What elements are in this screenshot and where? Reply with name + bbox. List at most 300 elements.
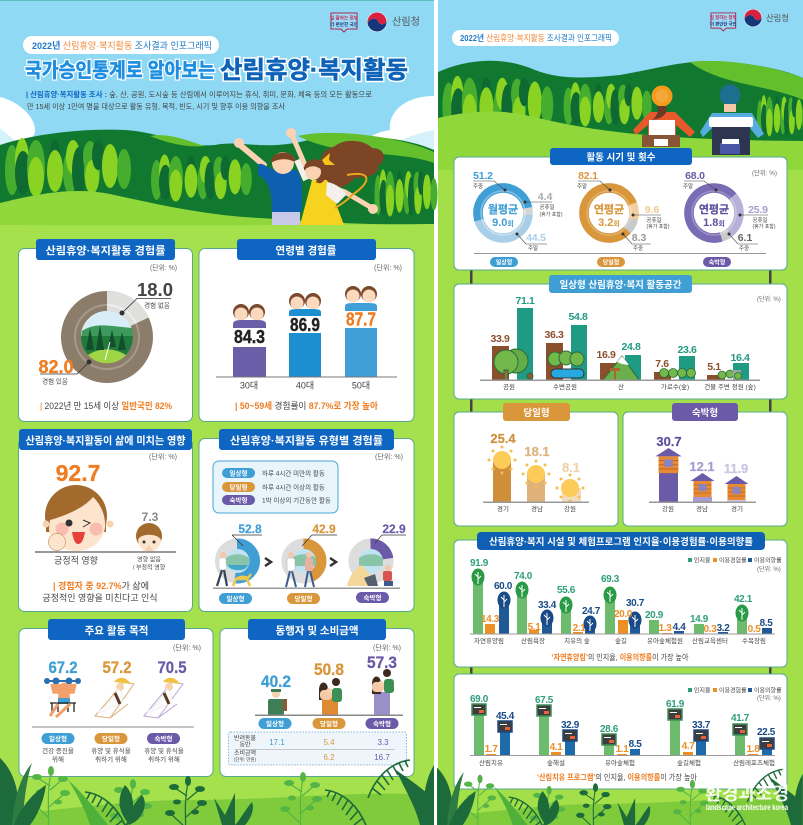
categories: 자연휴양림 — [474, 636, 504, 645]
values — [48, 658, 186, 677]
bar: 40s: 86.9 — [290, 315, 320, 335]
pills — [42, 733, 180, 744]
categories: 가로수(숲) — [661, 382, 689, 391]
categories: 치유의 숲 — [564, 636, 590, 645]
callout 82.0: 경험 있음 — [42, 376, 68, 386]
values: 30.7 — [626, 598, 645, 609]
legend: 인지율 — [694, 556, 711, 564]
logo: government campaign badge — [710, 13, 737, 31]
values: 32.9 — [561, 720, 580, 731]
values — [656, 434, 748, 476]
icon: garden — [718, 370, 742, 380]
values: 16.4 — [730, 352, 750, 364]
heading pill: 2022년 산림휴양·복지활동 조사결과 인포그래픽 — [460, 33, 612, 43]
ring: overnight: 연평균 — [699, 203, 729, 216]
values: 16.9 — [596, 349, 616, 361]
values: 5.1 — [707, 361, 721, 373]
age labels: 30대 — [240, 380, 258, 390]
donut chart — [71, 301, 143, 373]
ring: daily: 월평균 — [488, 202, 518, 216]
axis — [470, 755, 775, 756]
logo text: 산림청 — [766, 13, 789, 23]
icon: mountain — [603, 356, 639, 380]
baseline — [35, 551, 176, 553]
values: 12.1 — [689, 459, 715, 474]
logo text: 산림청 — [392, 16, 420, 28]
forest scene in donut — [81, 311, 133, 363]
heading — [237, 239, 376, 260]
values: 54.8 — [568, 311, 588, 323]
heading — [19, 429, 192, 450]
categories: 숲길 — [615, 637, 627, 645]
left panel background — [0, 0, 438, 825]
legend — [688, 686, 782, 694]
categories: 산 — [618, 382, 624, 391]
companion table: 6.2 — [323, 753, 335, 762]
pills: 당일형 — [102, 734, 120, 743]
labels: 영향 없음 — [137, 556, 161, 564]
values — [470, 558, 773, 635]
values: 1.1 — [616, 744, 629, 755]
companion table: (단위: 만원) — [234, 756, 257, 763]
panel: experience rate — [18, 239, 192, 422]
icon: deck chair — [95, 678, 134, 718]
heading: 산림휴양·복지 시설 및 체험프로그램 인지율·이용경험률·이용의향률 — [489, 536, 753, 548]
categories: 경남 — [531, 504, 543, 513]
bar: 30s — [233, 304, 266, 377]
values: 33.4 — [538, 600, 557, 611]
panel: facility awareness — [454, 532, 787, 667]
axis — [483, 502, 589, 503]
purpose labels — [42, 746, 184, 764]
ring: daily: 4.4 — [538, 191, 552, 203]
categories: 숲길체험 — [677, 759, 701, 767]
values — [490, 295, 750, 373]
heading — [550, 148, 692, 165]
legend: 이용경험률 — [719, 556, 747, 564]
companion table: 반려동물 — [234, 734, 257, 742]
heading: 당일형 — [523, 407, 550, 419]
ring: overnight: 68.0 — [685, 170, 705, 182]
pills — [219, 592, 389, 604]
values: 67.2 — [48, 658, 78, 677]
values: 22.5 — [757, 727, 776, 738]
donut: overnight type: 22.9 — [382, 522, 406, 536]
logo: taegeuk emblem — [367, 12, 387, 32]
axis — [470, 634, 775, 635]
purpose labels: 취하기 위해 — [148, 754, 180, 764]
legend — [688, 556, 782, 564]
values: 8.5 — [760, 618, 773, 629]
values: 24.7 — [582, 606, 601, 617]
heading — [219, 429, 394, 450]
chevron — [330, 558, 336, 566]
values: 61.9 — [666, 699, 685, 710]
title — [25, 57, 408, 84]
icon: small worried face — [136, 523, 162, 552]
value 7.3: 7.3 — [142, 510, 159, 524]
unit: (단위: %) — [757, 295, 781, 303]
categories: 강원 — [564, 504, 576, 513]
bar: 30s: 84.3 — [234, 327, 265, 347]
panel: effect on life — [18, 429, 192, 612]
values: 30.7 — [656, 434, 682, 449]
ring: daily: 9.0회 — [492, 217, 514, 229]
legend: 이용경험률 — [719, 686, 747, 694]
heading: 동행자 및 소비금액 — [275, 624, 359, 637]
values: 3.2 — [717, 623, 730, 634]
categories: 유아숲체험 — [605, 758, 635, 767]
heading: 연령별 경험률 — [276, 244, 337, 257]
values: 60.0 — [494, 581, 513, 592]
purpose labels: 위해 — [52, 754, 64, 764]
donut: overnight type — [347, 522, 406, 586]
caption: ‘산림치유 프로그램’의 인지율, 이용의향률이 가장 높아 — [537, 772, 698, 782]
values: 4.1 — [550, 742, 563, 753]
pills: 당일형 — [295, 594, 312, 603]
values: 69.3 — [601, 574, 620, 585]
axis — [649, 502, 756, 503]
pills — [258, 718, 398, 729]
donut: daily type — [217, 522, 262, 586]
values: 69.0 — [470, 694, 489, 705]
unit: (단위: %) — [375, 452, 403, 461]
ring: overnight: 25.9 — [748, 204, 768, 216]
callout 18.0: 18.0 — [137, 279, 173, 300]
companion table: 동반 — [239, 740, 251, 748]
pills: 숙박형 — [709, 258, 725, 266]
unit: (단위: %) — [374, 263, 402, 272]
donut: day trip type — [286, 522, 337, 587]
values: 91.9 — [470, 558, 489, 569]
value 92.7: 92.7 — [56, 460, 100, 486]
values: 50.8 — [314, 660, 344, 679]
values: 67.5 — [535, 695, 554, 706]
legend box: 당일형 — [230, 482, 247, 492]
ring: overnight: (휴가 포함) — [752, 223, 776, 230]
divider — [474, 253, 766, 254]
bars with suns — [488, 446, 584, 502]
legend box: 하루 4시간 이상의 활동 — [262, 482, 325, 492]
heading: 숙박형 — [692, 407, 718, 419]
categories — [497, 504, 576, 513]
values: 55.6 — [557, 585, 576, 596]
values: 1.8 — [747, 744, 760, 755]
caption: | 2022년 만 15세 이상 일반국민 82% — [40, 400, 172, 411]
bars — [474, 706, 772, 755]
categories: 수목장림 — [742, 636, 766, 645]
icons: sign boards — [472, 704, 774, 749]
bottom foliage right — [437, 768, 803, 825]
ring: day trip: 공휴일 — [646, 216, 662, 224]
values: 25.4 — [490, 431, 516, 446]
ring: day trip — [574, 170, 670, 252]
categories — [662, 504, 743, 513]
panel: companions and spending — [220, 619, 414, 776]
heading pill — [23, 36, 219, 54]
heading — [477, 532, 765, 550]
pills — [490, 257, 731, 267]
bar: 50s — [345, 286, 377, 377]
heading — [36, 239, 175, 260]
categories: 산림레포츠체험 — [733, 758, 775, 767]
labels: / 부정적 영향 — [133, 564, 166, 572]
values: 20.9 — [645, 610, 664, 621]
donut: day trip type: 42.9 — [312, 522, 336, 536]
companion table: 5.4 — [323, 738, 335, 747]
unit: (단위: %) — [173, 643, 201, 652]
ring: day trip: 연평균 — [594, 203, 624, 216]
values: 1.3 — [659, 623, 672, 634]
age labels — [240, 380, 370, 390]
panel: day trip regions — [454, 403, 618, 526]
values: 57.3 — [367, 653, 397, 672]
heading: 주요 활동 목적 — [85, 624, 148, 637]
values: 5.1 — [528, 622, 541, 633]
caption: ‘자연휴양림’의 인지율, 이용의향률이 가장 높아 — [552, 652, 689, 662]
illustration: two hikers from behind — [633, 84, 764, 155]
values: 4.4 — [673, 622, 686, 633]
ring: daily: (휴가 포함) — [539, 211, 563, 218]
bars — [492, 308, 749, 380]
purpose labels: 취하기 위해 — [95, 754, 127, 764]
pills: 일상형 — [496, 258, 512, 266]
heading: 산림휴양·복지활동이 삶에 미치는 영향 — [26, 434, 186, 447]
values: 57.2 — [102, 658, 132, 677]
icon: family bar 2 — [372, 669, 394, 715]
labels — [54, 554, 166, 572]
callout 82.0 — [38, 357, 92, 386]
bar: 40s — [289, 293, 321, 377]
labels: 긍정적 영향 — [54, 554, 98, 566]
values: 71.1 — [515, 295, 535, 307]
baseline — [255, 714, 403, 716]
icon: family bar — [319, 678, 342, 715]
values: 28.6 — [600, 724, 619, 735]
heading pill: 2022년 산림휴양·복지활동 조사결과 인포그래픽 — [32, 40, 212, 52]
icon: street trees — [660, 368, 696, 378]
heading: 산림휴양·복지활동 유형별 경험률 — [230, 434, 383, 447]
title: 국가승인통계로 알아보는 — [25, 59, 215, 82]
donut: daily type: 52.8 — [238, 522, 262, 536]
ring: overnight: 주중 — [739, 245, 749, 252]
ring: day trip: 82.1 — [578, 170, 598, 182]
caption: | 경험자 중 92.7%가 삶에 — [53, 580, 149, 591]
values: 18.1 — [524, 444, 550, 459]
unit: (단위: %) — [373, 643, 401, 652]
panel: experience by type — [199, 429, 414, 612]
purpose labels: 휴양 및 휴식을 — [144, 746, 184, 755]
purpose labels: 휴양 및 휴식을 — [91, 746, 131, 755]
title: 국가승인통계로 알아보는 — [25, 59, 215, 82]
panel: main purpose — [19, 619, 213, 776]
survey description: 만 15세 이상 1만여 명을 대상으로 활동 유형, 목적, 빈도, 시기 및 향후 이용 의향을 조사 — [27, 101, 285, 111]
categories: 강원 — [662, 504, 674, 513]
values: 14.9 — [690, 614, 709, 625]
heading — [48, 619, 185, 640]
icon: smiling face — [42, 485, 114, 551]
unit: (단위: %) — [149, 452, 177, 461]
companion table: 17.1 — [269, 738, 285, 747]
values: 24.8 — [621, 341, 641, 353]
ring: day trip: (휴가 포함) — [646, 223, 670, 230]
axis — [480, 380, 760, 381]
values: 36.3 — [544, 329, 564, 341]
values: 45.4 — [496, 711, 515, 722]
baseline — [213, 588, 400, 589]
legend: 인지율 — [694, 686, 711, 694]
values: 7.6 — [655, 358, 669, 370]
ring: day trip: 9.6 — [645, 204, 659, 216]
heading — [503, 403, 570, 421]
categories: 수변공원 — [553, 382, 577, 391]
callout 18.0 — [120, 279, 173, 316]
caption: 긍정적인 영향을 미친다고 인식 — [42, 592, 158, 603]
ring: daily — [472, 170, 563, 252]
legend box: 하루 4시간 미만의 활동 — [262, 468, 325, 478]
panel: program awareness — [454, 674, 787, 789]
right panel background — [438, 0, 803, 825]
values: 33.9 — [490, 333, 510, 345]
ring: daily: 주말 — [528, 244, 538, 252]
ring: daily: 44.5 — [526, 232, 546, 244]
icon: waterside park — [548, 351, 584, 378]
caption: | 50~59세 경험률이 87.7%로 가장 높아 — [235, 400, 379, 411]
title: 산림휴양·복지활동 — [220, 57, 408, 84]
ring: day trip: 주중 — [633, 245, 643, 252]
values: 14.3 — [481, 614, 500, 625]
values: 0.3 — [704, 624, 717, 635]
values: 70.5 — [158, 658, 186, 677]
caption — [42, 580, 158, 603]
categories: 경기 — [497, 504, 509, 513]
pills: 숙박형 — [364, 593, 381, 602]
heading — [549, 275, 692, 293]
bars — [473, 575, 772, 634]
ring: daily: 주중 — [473, 183, 483, 190]
panel: timing and frequency — [454, 148, 787, 270]
values: 20.0 — [614, 609, 633, 620]
categories — [474, 636, 766, 645]
values: 42.1 — [734, 594, 753, 605]
values: 74.0 — [514, 571, 533, 582]
heading: 활동 시기 및 횟수 — [586, 152, 656, 164]
heading pill — [452, 30, 619, 46]
values: 41.7 — [731, 713, 750, 724]
values: 8.1 — [562, 460, 580, 475]
heading — [672, 403, 738, 421]
heading: 일상형 산림휴양·복지 활동공간 — [560, 279, 682, 291]
title: 산림휴양·복지활동 — [220, 57, 408, 84]
icons: tree tops on bars — [472, 568, 748, 632]
legend: 이용의향률 — [754, 686, 782, 694]
logo: taegeuk emblem — [744, 9, 762, 27]
age labels: 50대 — [352, 380, 370, 390]
axis — [216, 376, 397, 378]
categories — [503, 382, 756, 391]
pills: 당일형 — [320, 719, 338, 728]
heading — [248, 619, 386, 640]
watermark: 환경과조경 — [705, 784, 789, 804]
values — [470, 694, 776, 755]
pills: 일상형 — [227, 594, 244, 603]
ring: overnight: 1.8회 — [703, 217, 725, 229]
categories: 유아숲체험원 — [647, 636, 683, 645]
age labels: 40대 — [296, 380, 314, 390]
survey description — [26, 89, 372, 111]
callout 82.0: 82.0 — [38, 357, 74, 377]
bars with cabins — [655, 448, 748, 502]
values: 11.9 — [724, 461, 748, 476]
unit: (단위: %) — [150, 263, 177, 272]
categories: 공원 — [503, 382, 515, 391]
companion table: 소비금액 — [234, 749, 256, 757]
values: 8.5 — [629, 739, 642, 750]
bottom foliage left — [0, 758, 434, 825]
panel: overnight regions — [623, 403, 787, 526]
legend box: 1박 이상의 기간동안 활동 — [262, 496, 331, 504]
panel: experience by age — [199, 239, 414, 422]
categories: 산림욕장 — [521, 636, 545, 645]
divider — [32, 726, 194, 728]
ring: daily: 공휴일 — [539, 203, 555, 211]
values: 23.6 — [677, 344, 697, 356]
categories: 경남 — [696, 504, 708, 513]
unit: (단위: %) — [757, 565, 781, 573]
bar: 50s: 87.7 — [346, 310, 376, 330]
values: 0.5 — [748, 624, 761, 635]
companion table — [228, 732, 406, 765]
unit: (단위: %) — [752, 168, 777, 177]
pills: 숙박형 — [155, 734, 172, 743]
ring: day trip: 3.2회 — [598, 217, 620, 229]
values: 4.7 — [682, 741, 695, 752]
icon: deck chair 2 — [144, 678, 183, 718]
legend box — [213, 461, 338, 513]
values — [490, 431, 580, 475]
hooks — [470, 262, 772, 680]
panel: daily activity space — [454, 275, 787, 399]
ring: day trip: 8.3 — [632, 232, 646, 244]
illustration: man and woman cheering — [234, 128, 384, 225]
logo: government campaign badge — [330, 13, 359, 32]
categories: 숲해설 — [547, 758, 565, 767]
categories: 경기 — [731, 504, 743, 513]
legend box: 숙박형 — [230, 496, 247, 504]
pills: 숙박형 — [373, 719, 391, 728]
values: 40.2 — [261, 672, 291, 691]
ring: daily: 51.2 — [473, 170, 493, 182]
values: 33.7 — [692, 720, 711, 731]
ring: overnight: 공휴일 — [752, 216, 768, 224]
values: 2.1 — [573, 623, 586, 634]
companion table: 3.3 — [377, 738, 389, 747]
icon: weightlifter — [44, 678, 81, 717]
ring: overnight: 주말 — [683, 182, 693, 190]
categories: 산림교육센터 — [692, 636, 728, 645]
ring: day trip: 주말 — [577, 182, 587, 190]
survey description: | 산림휴양·복지활동 조사 : 숲, 산, 공원, 도시숲 등 산림에서 이루어지는 휴식, 취미, 문화, 체육 등의 모든 활동으로 — [26, 89, 372, 99]
unit: (단위: %) — [757, 694, 781, 702]
values: 1.7 — [485, 744, 498, 755]
icon: park trees — [494, 349, 533, 380]
heading: 산림휴양·복지활동 경험률 — [46, 244, 166, 257]
chevron — [265, 558, 271, 566]
icon: hiker — [268, 689, 287, 715]
companion table: 16.7 — [374, 753, 390, 762]
ring: overnight — [683, 170, 776, 252]
values — [261, 653, 397, 691]
